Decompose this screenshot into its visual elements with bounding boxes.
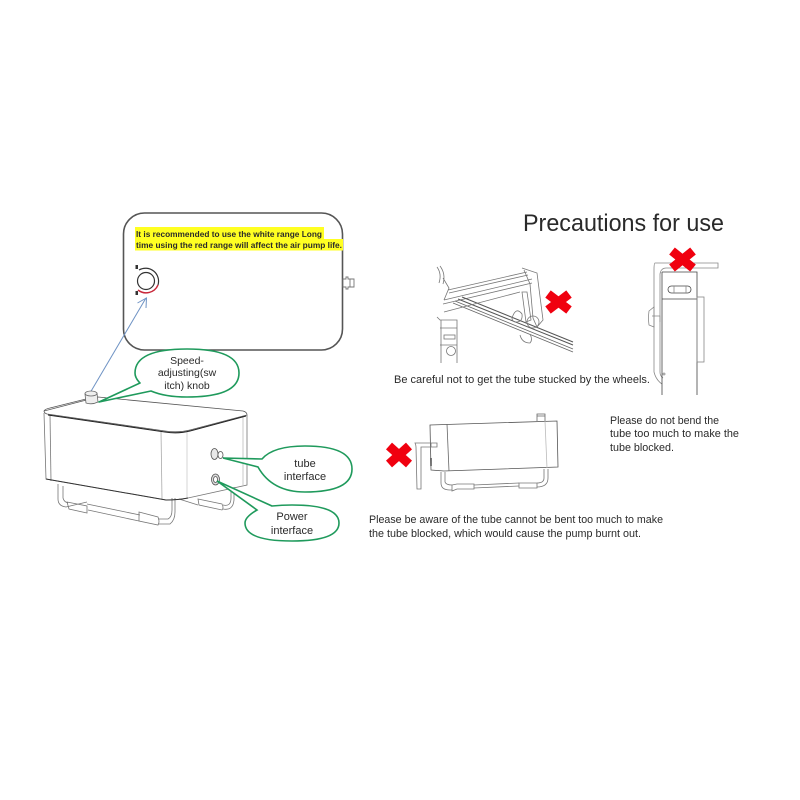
panel: bent tube side view xyxy=(648,263,718,395)
pump feet tubing xyxy=(58,484,234,525)
icon: top knob xyxy=(85,391,98,404)
pump body sides xyxy=(44,413,247,500)
callout: speed knob: adjusting(sw xyxy=(158,367,217,379)
text: tube blocked warning: Please be aware of the tube cannot be bent too much to make xyxy=(369,514,663,526)
icon: red x side view xyxy=(389,446,409,464)
callout: power interface: Power xyxy=(276,511,308,523)
panel: pump side view bent tube xyxy=(415,414,558,491)
pump top surface xyxy=(44,397,247,432)
icon: tube port xyxy=(211,448,223,460)
icon: speed knob dial xyxy=(136,265,159,295)
recommendation highlight: time using the red range will affect the air pump life. xyxy=(136,240,342,250)
panel: top view of pump with knob xyxy=(124,213,354,350)
icon: power port xyxy=(212,474,220,485)
icon: red x tube bend xyxy=(672,251,693,268)
text: tube blocked warning xyxy=(369,514,663,540)
recommendation highlight xyxy=(135,227,343,250)
callout: tube interface xyxy=(223,446,352,492)
icon: side nozzle xyxy=(343,277,354,289)
recommendation highlight: It is recommended to use the white range Long xyxy=(136,229,322,239)
callout: power interface xyxy=(217,481,339,541)
callout: power interface: interface xyxy=(271,525,313,537)
text: tube blocked warning: the tube blocked, which would cause the pump burnt out. xyxy=(369,528,641,540)
callout: tube interface: interface xyxy=(284,471,326,483)
callout: speed knob: Speed- xyxy=(170,355,204,367)
text: tube bend caution: Please do not bend the xyxy=(610,415,719,427)
callout: speed knob xyxy=(99,349,239,402)
text: tube bend caution: tube blocked. xyxy=(610,442,674,454)
text: tube bend caution xyxy=(610,415,739,454)
panel: pump perspective drawing xyxy=(44,391,247,525)
text: tube bend caution: tube too much to make the xyxy=(610,428,739,440)
callout: speed knob: itch) knob xyxy=(164,380,210,392)
icon: red x wheels xyxy=(548,294,569,310)
text: wheels caution: Be careful not to get the tube stucked by the wheels. xyxy=(394,374,650,386)
arrow: knob to dial xyxy=(90,298,146,393)
top view body outline xyxy=(124,213,342,350)
panel: wheel warning drawing xyxy=(437,266,573,363)
title: Precautions for use xyxy=(523,210,724,237)
callout: tube interface: tube xyxy=(294,458,316,470)
